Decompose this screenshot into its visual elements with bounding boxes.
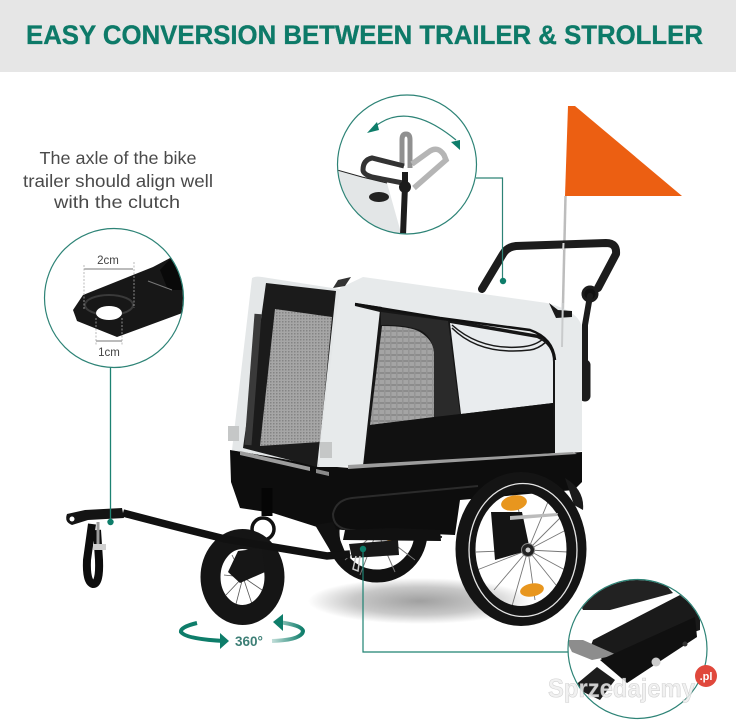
left leader line (110, 367, 112, 522)
watermark badge (695, 665, 717, 687)
top strap (355, 304, 555, 360)
text block: axle alignment note: The axle of the bike (40, 148, 196, 168)
pole over canopy (561, 303, 564, 347)
flag pole (562, 196, 566, 347)
stroller loop stem (262, 488, 272, 516)
front fork (228, 548, 265, 583)
frame tube (333, 486, 478, 537)
callout: handlebar adjustment (330, 95, 506, 284)
front tyre (210, 539, 274, 615)
lower side panel (363, 403, 555, 466)
roll-up straps (452, 325, 546, 351)
bottom leader line (363, 549, 568, 652)
ground shadow (308, 578, 532, 624)
left arrow (181, 623, 224, 641)
main rim (469, 484, 577, 616)
dark handle (363, 158, 404, 183)
side clip (320, 442, 332, 458)
hinge post (403, 172, 405, 235)
flag mount (549, 303, 572, 318)
1cm label: 1cm (98, 347, 120, 359)
tow bar (66, 508, 399, 584)
main wheel (466, 478, 583, 616)
rotation arrow (371, 116, 456, 140)
main fender (565, 478, 583, 510)
front spokes (224, 552, 262, 604)
side dark panel (355, 303, 555, 466)
bottom circle ring (568, 580, 707, 718)
axle bracket (491, 512, 530, 560)
left leader dot (107, 519, 114, 525)
2cm label: 2cm (97, 255, 119, 267)
rear clip (228, 426, 239, 441)
dimension lines (84, 269, 133, 341)
rear mesh window (260, 309, 332, 446)
roof latch (333, 277, 351, 288)
360 label: 360° (235, 634, 263, 649)
text block: axle alignment note: with the clutch (53, 192, 180, 212)
upper reflector (500, 493, 528, 513)
left circle ring (44, 228, 184, 368)
bar tube (123, 513, 350, 556)
rear reflective stripe (240, 451, 310, 471)
right arrow (272, 622, 303, 641)
lower reflector (519, 582, 545, 598)
strap clip (96, 522, 100, 546)
callout: hitch plate dimensions (44, 228, 186, 525)
mounting bracket (349, 540, 399, 558)
top circle detail (330, 134, 446, 240)
flag (562, 106, 682, 347)
frame rail (343, 528, 441, 541)
watermark: Sprzedajemy (548, 673, 695, 703)
trailer canopy (228, 277, 582, 476)
frame strut (315, 522, 345, 557)
safety pin (353, 556, 360, 571)
dark panel upper fill (381, 312, 460, 417)
top leader line (476, 178, 502, 281)
lower black tub and frame (230, 450, 582, 557)
hitch plate (73, 257, 186, 337)
faded handle positions (402, 134, 410, 168)
side white window (450, 323, 553, 414)
front wheel (210, 518, 274, 615)
title: EASY CONVERSION BETWEEN TRAILER & STROLLER (26, 20, 703, 50)
text block: axle alignment note: trailer should align well (23, 171, 213, 191)
top circle ring (338, 95, 476, 234)
text block: axle alignment note (23, 148, 213, 212)
bottom leader dot (360, 546, 366, 552)
watermark: .pl (700, 671, 712, 683)
orange pennant (565, 106, 682, 196)
side white panel (318, 277, 582, 467)
rear hidden wheel (333, 488, 421, 576)
rear strap (248, 314, 258, 445)
hitch (66, 508, 124, 525)
rotation arrows: 360 degrees (181, 614, 303, 649)
safety strap (87, 524, 99, 584)
front fork loop (252, 518, 274, 540)
side white block beside door (320, 303, 380, 466)
side mesh window (370, 326, 434, 425)
header band (0, 0, 736, 72)
main spokes (476, 495, 568, 606)
hub (522, 544, 534, 556)
rear white panel (232, 277, 345, 467)
stroller handlebar (482, 243, 616, 396)
rear dark frame (243, 283, 336, 467)
top leader dot (500, 278, 506, 284)
side reflective stripe (348, 452, 577, 469)
bracket detail (566, 572, 700, 700)
callout: frame bracket (360, 546, 707, 718)
main tyre (466, 482, 576, 616)
